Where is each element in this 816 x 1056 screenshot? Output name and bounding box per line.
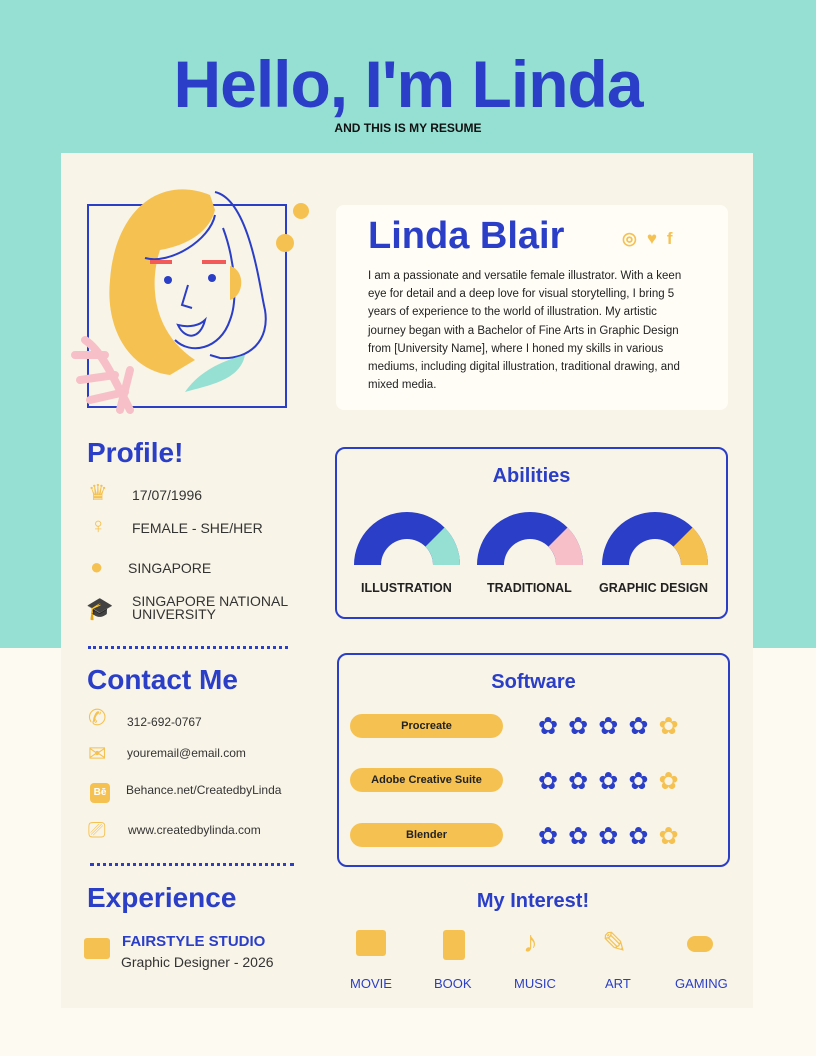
profile list: 🎓 (86, 596, 113, 621)
contact list: ✆ (88, 705, 106, 730)
profile list: ♛ (88, 480, 108, 505)
abilities panel: ILLUSTRATION (361, 581, 452, 595)
bio text: I am a passionate and versatile female illustrator. With a keen eye for detail and a deep love for visual storytelling, I bring 5 years of experience to the world of illustration. My artistic journey began with a Bachelor of Fine Arts in Graphic Design from [University Name], where I honed my skills in various mediums, including digital illustration, traditional drawing, and mixed media. (368, 270, 681, 391)
star ratings: ✿✿✿✿✿ (538, 713, 689, 740)
interest icons: ✎ (602, 927, 627, 960)
contact list: ⎚ (88, 817, 106, 842)
teal header background (0, 0, 816, 648)
interest heading: My Interest! (477, 890, 589, 912)
text: Blender (406, 829, 447, 841)
interest icons: ♪ (523, 926, 538, 959)
software pills (350, 714, 503, 738)
subtitle: AND THIS IS MY RESUME (334, 121, 482, 135)
profile list: SINGAPORE NATIONAL (132, 593, 288, 609)
interest icons: BOOK (434, 976, 472, 991)
contact list: www.createdbylinda.com (128, 823, 261, 837)
text: Adobe Creative Suite (371, 774, 482, 786)
experience item (84, 933, 274, 970)
contact list (88, 705, 282, 842)
contact list: 312-692-0767 (127, 715, 202, 729)
profile list (86, 480, 288, 622)
name: Linda Blair (368, 215, 564, 257)
star ratings (538, 713, 689, 850)
contact list: ✉ (88, 741, 106, 766)
contact list: Behance.net/CreatedbyLinda (126, 783, 281, 797)
contact list: youremail@email.com (127, 746, 246, 760)
experience item: FAIRSTYLE STUDIO (122, 933, 265, 950)
portrait illustration (71, 189, 309, 414)
abilities panel: TRADITIONAL (487, 581, 572, 595)
interest icons (350, 926, 728, 991)
title: Hello, I'm Linda (173, 47, 643, 121)
star ratings: ✿✿✿✿✿ (538, 823, 689, 850)
software panel: Software (491, 671, 576, 693)
donut charts (354, 512, 708, 565)
profile heading: Profile! (87, 437, 183, 468)
experience heading: Experience (87, 882, 236, 913)
profile list: SINGAPORE (128, 560, 211, 576)
abilities panel (335, 447, 728, 619)
bio panel (336, 205, 728, 410)
profile list: ♀ (90, 513, 106, 538)
software pills: Procreate (401, 720, 452, 732)
profile list: ● (90, 554, 103, 579)
social icons: ◎♥f (622, 229, 683, 248)
contact list: Bē (94, 787, 106, 798)
interest icons: GAMING (675, 976, 728, 991)
star ratings: ✿✿✿✿✿ (538, 768, 689, 795)
profile list: 17/07/1996 (132, 487, 202, 503)
profile list: FEMALE - SHE/HER (132, 520, 263, 536)
abilities panel: GRAPHIC DESIGN (599, 581, 708, 595)
interest icons: MUSIC (514, 976, 556, 991)
software panel (337, 653, 730, 867)
profile list: UNIVERSITY (132, 606, 216, 622)
contact heading: Contact Me (87, 664, 238, 695)
interest icons: MOVIE (350, 976, 392, 991)
main card (61, 153, 753, 1008)
interest icons: ART (605, 976, 631, 991)
abilities panel: Abilities (493, 465, 570, 487)
experience item: Graphic Designer - 2026 (121, 954, 274, 970)
